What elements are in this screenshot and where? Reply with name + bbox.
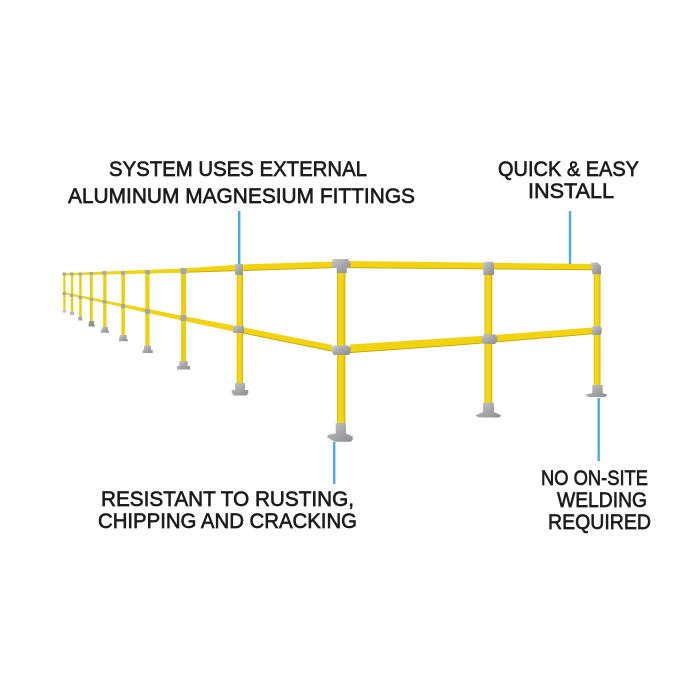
near post 1 <box>237 268 243 384</box>
lower rail right run <box>350 327 595 353</box>
text: resistant to rusting: CHIPPING AND CRACKING <box>98 510 357 533</box>
top rail left run <box>64 262 335 275</box>
text: quick and easy install <box>498 158 639 203</box>
callout line: rust resistant <box>333 442 335 484</box>
floor bases <box>232 383 607 442</box>
text: system uses external fittings <box>68 158 415 208</box>
near post 4 <box>594 268 600 388</box>
text: system uses external fittings: ALUMINUM MAGNESIUM FITTINGS <box>68 185 415 208</box>
text: quick and easy install: QUICK & EASY <box>498 158 639 181</box>
near post 2 corner <box>337 266 345 426</box>
text: quick and easy install: INSTALL <box>528 180 614 203</box>
near post 3 <box>484 266 492 406</box>
near fittings <box>233 259 602 355</box>
callout line: no welding <box>598 398 600 461</box>
callout line: quick install <box>569 211 571 264</box>
text: resistant to rusting <box>98 488 357 533</box>
top rail right run <box>345 261 597 270</box>
text: system uses external fittings: SYSTEM USES EXTERNAL <box>109 158 367 181</box>
text: no on-site welding: WELDING <box>557 489 647 512</box>
far fittings <box>62 268 186 321</box>
rail shading <box>183 268 597 353</box>
railing illustration <box>62 259 607 442</box>
text: no on-site welding: REQUIRED <box>548 511 651 534</box>
text: no on-site welding <box>541 467 651 534</box>
callout line: fittings <box>238 211 240 264</box>
far left bases <box>62 310 190 370</box>
lower rail left run <box>64 292 332 352</box>
text: no on-site welding: NO ON-SITE <box>541 467 648 490</box>
far left posts <box>63 270 186 361</box>
text: resistant to rusting: RESISTANT TO RUSTING, <box>101 488 354 511</box>
